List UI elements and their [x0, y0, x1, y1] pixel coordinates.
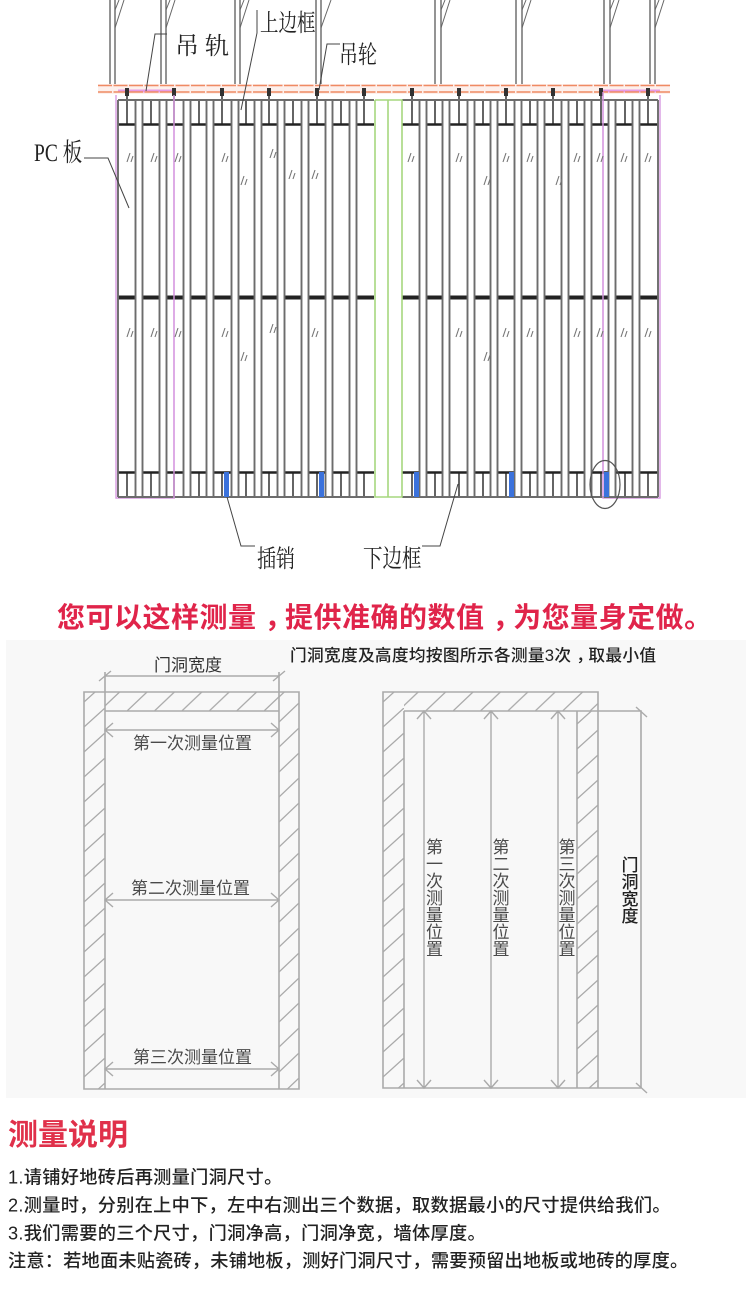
- note: 注意：若地面未贴瓷砖，未铺地板，测好门洞尺寸，需要预留出地板或地砖的厚度。: [8, 1251, 688, 1271]
- blue latch pins: [224, 472, 609, 497]
- door frame: [383, 692, 641, 1088]
- text block: instructions: [8, 1168, 688, 1271]
- rollers: [125, 88, 650, 96]
- label: door height: 门洞宽度: [618, 856, 638, 924]
- note: measure three times: 门洞宽度及高度均按图所示各测量3次 ，取最小值: [290, 645, 656, 665]
- door frame: [84, 672, 299, 1089]
- section heading: measuring notes: 测量说明: [8, 1119, 128, 1152]
- green centre panel: [375, 100, 402, 497]
- label: third position: 第三次测量位置: [133, 1048, 252, 1067]
- label: 插销: 插销: [257, 546, 295, 573]
- panel background: [6, 640, 746, 1098]
- label: 吊轮: 吊轮: [339, 42, 377, 69]
- label: second position: 第二次测量位置: [131, 879, 250, 898]
- label: 吊轨: 吊 轨: [175, 33, 229, 60]
- label: door width: 门洞宽度: [154, 656, 222, 675]
- purple frame highlights: [116, 92, 660, 498]
- instruction 2: 2.测量时，分别在上中下，左中右测出三个数据，取数据最小的尺寸提供给我们。: [8, 1196, 671, 1216]
- label: 下边框: 下边框: [363, 545, 421, 573]
- glass marks: [127, 149, 651, 361]
- label: first position: 第一次测量位置: [133, 734, 252, 753]
- diagram: height measurement: [383, 692, 647, 1093]
- panel: door structure diagram: [34, 0, 670, 573]
- measurement lines: [99, 671, 285, 1076]
- T bars and stems: [118, 88, 658, 497]
- label: PC板: PC 板: [34, 139, 82, 167]
- wall hatching: [84, 692, 299, 1089]
- label: second height position: 第二次测量位置: [490, 838, 509, 957]
- heading: measurement prompt: 您可以这样测量 ，提供准确的数值 ，为您量身定做。: [57, 602, 713, 633]
- label: third height position: 第三次测量位置: [556, 838, 575, 957]
- wall hatching: [383, 692, 598, 1088]
- hanging rail: [98, 84, 670, 94]
- instruction 1: 1.请铺好地砖后再测量门洞尺寸。: [8, 1168, 283, 1188]
- hanging posts: [110, 0, 664, 86]
- measurement lines: [417, 707, 647, 1093]
- door panels and vertical profiles: [118, 100, 658, 497]
- instruction 3: 3.我们需要的三个尺寸，门洞净高，门洞净宽，墙体厚度。: [8, 1224, 486, 1244]
- label: first height position: 第一次测量位置: [423, 838, 442, 957]
- label: 上边框: 上边框: [260, 10, 315, 37]
- diagram: width measurement: [84, 656, 299, 1089]
- detail circle: [590, 460, 620, 508]
- panel: door measuring diagrams: [6, 640, 746, 1098]
- leader lines: [84, 10, 458, 546]
- repeat purple lines above profiles: [174, 92, 603, 498]
